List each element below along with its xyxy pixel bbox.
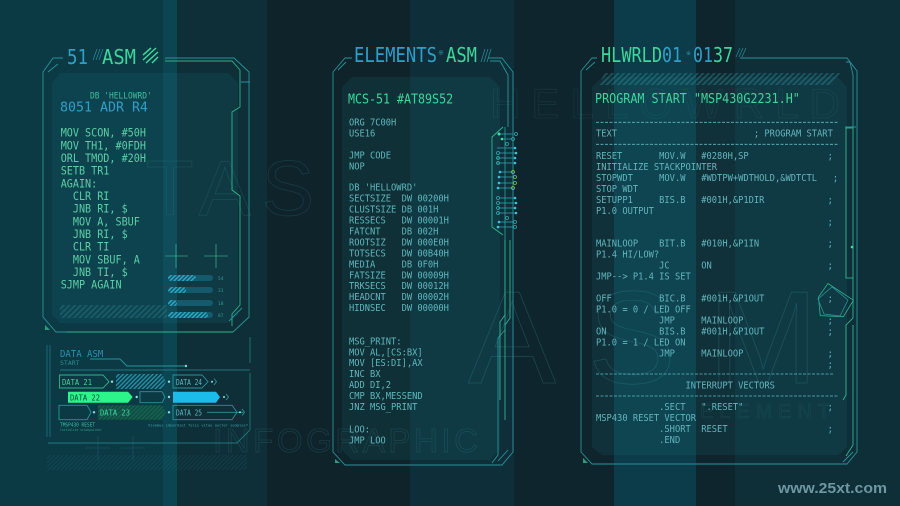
start label: START (60, 359, 80, 367)
panel fill (342, 77, 500, 460)
panel: HLWRLD01 0137 (581, 43, 857, 464)
ghost text: INFOGRAPHIC: INFOGRAPHIC (213, 422, 478, 459)
caption left: TMSP430 RESET (60, 422, 95, 428)
title (601, 43, 746, 67)
chevrons (214, 378, 244, 416)
tag: DATA 21: DATA 21 (62, 378, 92, 387)
tag: DATA 24: DATA 24 (176, 378, 202, 387)
code listing: JMP MAINLOOP ; (596, 315, 833, 327)
title: 37 (713, 43, 733, 67)
code listing: NOP (349, 161, 365, 173)
tag: DATA 22 (68, 392, 133, 403)
title: 51 (67, 45, 88, 69)
tag: DATA 23 (98, 405, 166, 420)
code listing: OFF BIC.B #001H,&P1OUT ; (596, 293, 833, 305)
code listing: .SHORT RESET ; (596, 423, 833, 435)
circuit widget (496, 132, 518, 228)
tag: DATA 23: DATA 23 (100, 408, 130, 418)
code listing: ROOTSIZ DW 000E0H (349, 237, 449, 249)
panel fill (52, 73, 238, 323)
faint crosses (86, 436, 145, 460)
data frame lines (48, 337, 250, 443)
heading: MCS-51 #AT89S52 (348, 90, 453, 107)
panel frame (43, 58, 250, 332)
code listing: .END (596, 434, 681, 446)
code listing: JMP CODE (349, 150, 391, 161)
code listing: MOV SCON, #50H (61, 126, 146, 140)
code listing: HEADCNT DW 00002H (349, 292, 449, 303)
data heading: DATA ASM (60, 349, 104, 360)
code listing: TOTSECS DW 00B40H (349, 248, 449, 260)
code listing: P1.0 OUTPUT (596, 205, 654, 217)
ghost text: ASM large: ASM (468, 264, 818, 411)
code listing: LOO: (349, 424, 370, 435)
code listing: MSP430 RESET VECTOR (596, 412, 696, 424)
code listing: AGAIN: (61, 177, 97, 191)
code listing: INC BX (349, 369, 381, 380)
tag: DATA 22: DATA 22 (70, 394, 100, 402)
code listing: CLR RI (61, 189, 109, 203)
code listing: RESSECS DW 00001H (349, 215, 449, 227)
progress bars (168, 275, 224, 319)
code listing: MOV [ES:DI],AX (349, 358, 423, 369)
code listing: ORG 7C00H (349, 117, 397, 129)
outline tag (59, 405, 91, 420)
code listing: USE16 (349, 128, 376, 140)
code listing: SETB TR1 (61, 164, 109, 178)
code listing: STOP WDT (596, 183, 638, 195)
panel: ELEMENTS ASM (333, 43, 518, 465)
panel: 51 ASM (43, 45, 250, 332)
code listing: SECTSIZE DW 00200H (349, 193, 449, 205)
dashed rules (596, 122, 838, 396)
code subtitle: 8051 ADR R4 (60, 100, 148, 116)
code listing: INTERRUPT VECTORS (596, 380, 775, 391)
tag: DATA 24 (173, 375, 208, 388)
top hatch (600, 73, 840, 85)
code listing: MEDIA DB 0F0H (349, 259, 439, 270)
connector (90, 359, 185, 366)
caption left: Initialize stackpointer (60, 428, 102, 432)
bottom hatch (60, 305, 167, 318)
code listing: DB 'HELLOWRD' (349, 182, 417, 194)
code listing: ; (596, 359, 833, 370)
panel fill (592, 77, 847, 455)
crosshairs (165, 244, 228, 268)
ghost text: HELLOWRLD: HELLOWRLD (490, 80, 840, 127)
code listing: JNB TI, $ (61, 265, 128, 279)
code listing: JC ON ; (596, 260, 833, 272)
panel: data flow (47, 337, 250, 470)
code listing: P1.0 = 1 / LED ON (596, 337, 686, 349)
ghost text: ELEMENT: ELEMENT (700, 401, 830, 423)
code listing (596, 128, 838, 446)
code listing: ORL TMOD, #20H (61, 151, 146, 165)
title: ASM (102, 45, 136, 69)
title: ASM (446, 43, 477, 67)
code listing: JMP LOO (349, 435, 386, 446)
code listing: CMP BX,MESSEND (349, 390, 423, 402)
watermark: www.25xt.com (777, 481, 887, 497)
code listing: HIDNSEC DW 00000H (349, 302, 449, 314)
progress bars: 54 (218, 276, 224, 282)
title: ※ (686, 50, 691, 57)
code listing: JMP MAINLOOP ; (596, 348, 833, 360)
code listing: ADD DI,2 (349, 380, 391, 391)
dark hatch strip (47, 455, 247, 470)
code listing: P1.4 HI/LOW? (596, 249, 659, 261)
code listing: ; (596, 216, 833, 228)
code listing: MOV TH1, #0FDH (61, 139, 146, 153)
code listing: TEXT ; PROGRAM START (596, 128, 833, 140)
title: 01 (693, 43, 713, 67)
code listing (61, 126, 146, 292)
code listing: MSG_PRINT: (349, 336, 402, 347)
code listing: MOV AL,[CS:BX] (349, 347, 423, 358)
code listing: P1.0 = 0 / LED OFF (596, 304, 691, 316)
tag: DATA 21 (60, 375, 109, 388)
code listing: RESET MOV.W #0280H,SP ; (596, 150, 833, 162)
code listing: MOV A, SBUF (61, 215, 140, 229)
code listing: SETUPP1 BIS.B #001H,&P1DIR ; (596, 194, 833, 206)
code listing: TRKSECS DW 00012H (349, 281, 449, 292)
code listing: JNB RI, $ (61, 227, 128, 241)
code listing: ON BIS.B #001H,&P1OUT ; (596, 326, 833, 338)
title: ELEMENTS (354, 43, 437, 67)
code listing: JNB RI, $ (61, 202, 128, 216)
code listing (349, 117, 449, 446)
code listing: STOPWDT MOV.W #WDTPW+WDTHOLD,&WDTCTL ; (596, 172, 838, 184)
caption right: Vivamus imperdiet felis vitae auctor sodales? (148, 422, 248, 428)
title: HLWRLD (601, 43, 662, 67)
progress bars: 31 (218, 288, 224, 294)
code listing: FATCNT DB 002H (349, 226, 439, 238)
code listing: INITIALIZE STACKPOINTER (596, 161, 717, 173)
panel frame (333, 58, 513, 465)
code header: DB 'HELLOWRD' (90, 90, 152, 100)
blue arrow (173, 392, 220, 403)
code listing: .SECT ".RESET" ; (596, 401, 833, 413)
caption left (60, 422, 102, 432)
title: ※ (438, 49, 444, 57)
code listing: MOV SBUF, A (61, 253, 140, 267)
progress bars: 87 (218, 313, 224, 319)
tag: DATA 25: DATA 25 (176, 408, 202, 418)
title: 01 (662, 43, 682, 67)
panel frame (581, 58, 857, 464)
code listing: MAINLOOP BIT.B #010H,&P1IN ; (596, 238, 833, 250)
hatched arrow (116, 374, 166, 389)
code listing: SJMP AGAIN (61, 278, 122, 292)
data frame (47, 345, 50, 437)
code listing: FATSIZE DW 00009H (349, 270, 449, 281)
heading: PROGRAM START "MSP430G2231.H" (595, 91, 800, 107)
code listing: JNZ MSG_PRINT (349, 401, 418, 413)
connector dots (93, 380, 241, 413)
code listing: CLUSTSIZE DB 001H (349, 204, 439, 216)
code listing: JMP--> P1.4 IS SET (596, 271, 691, 283)
progress bars: 18 (218, 301, 224, 307)
outline arrow (140, 392, 165, 403)
title (67, 45, 158, 69)
pentagon widget (815, 282, 856, 321)
tag: DATA 25 (173, 405, 243, 420)
code listing: CLR TI (61, 240, 109, 254)
ghost text: TAS: TAS (146, 144, 314, 232)
